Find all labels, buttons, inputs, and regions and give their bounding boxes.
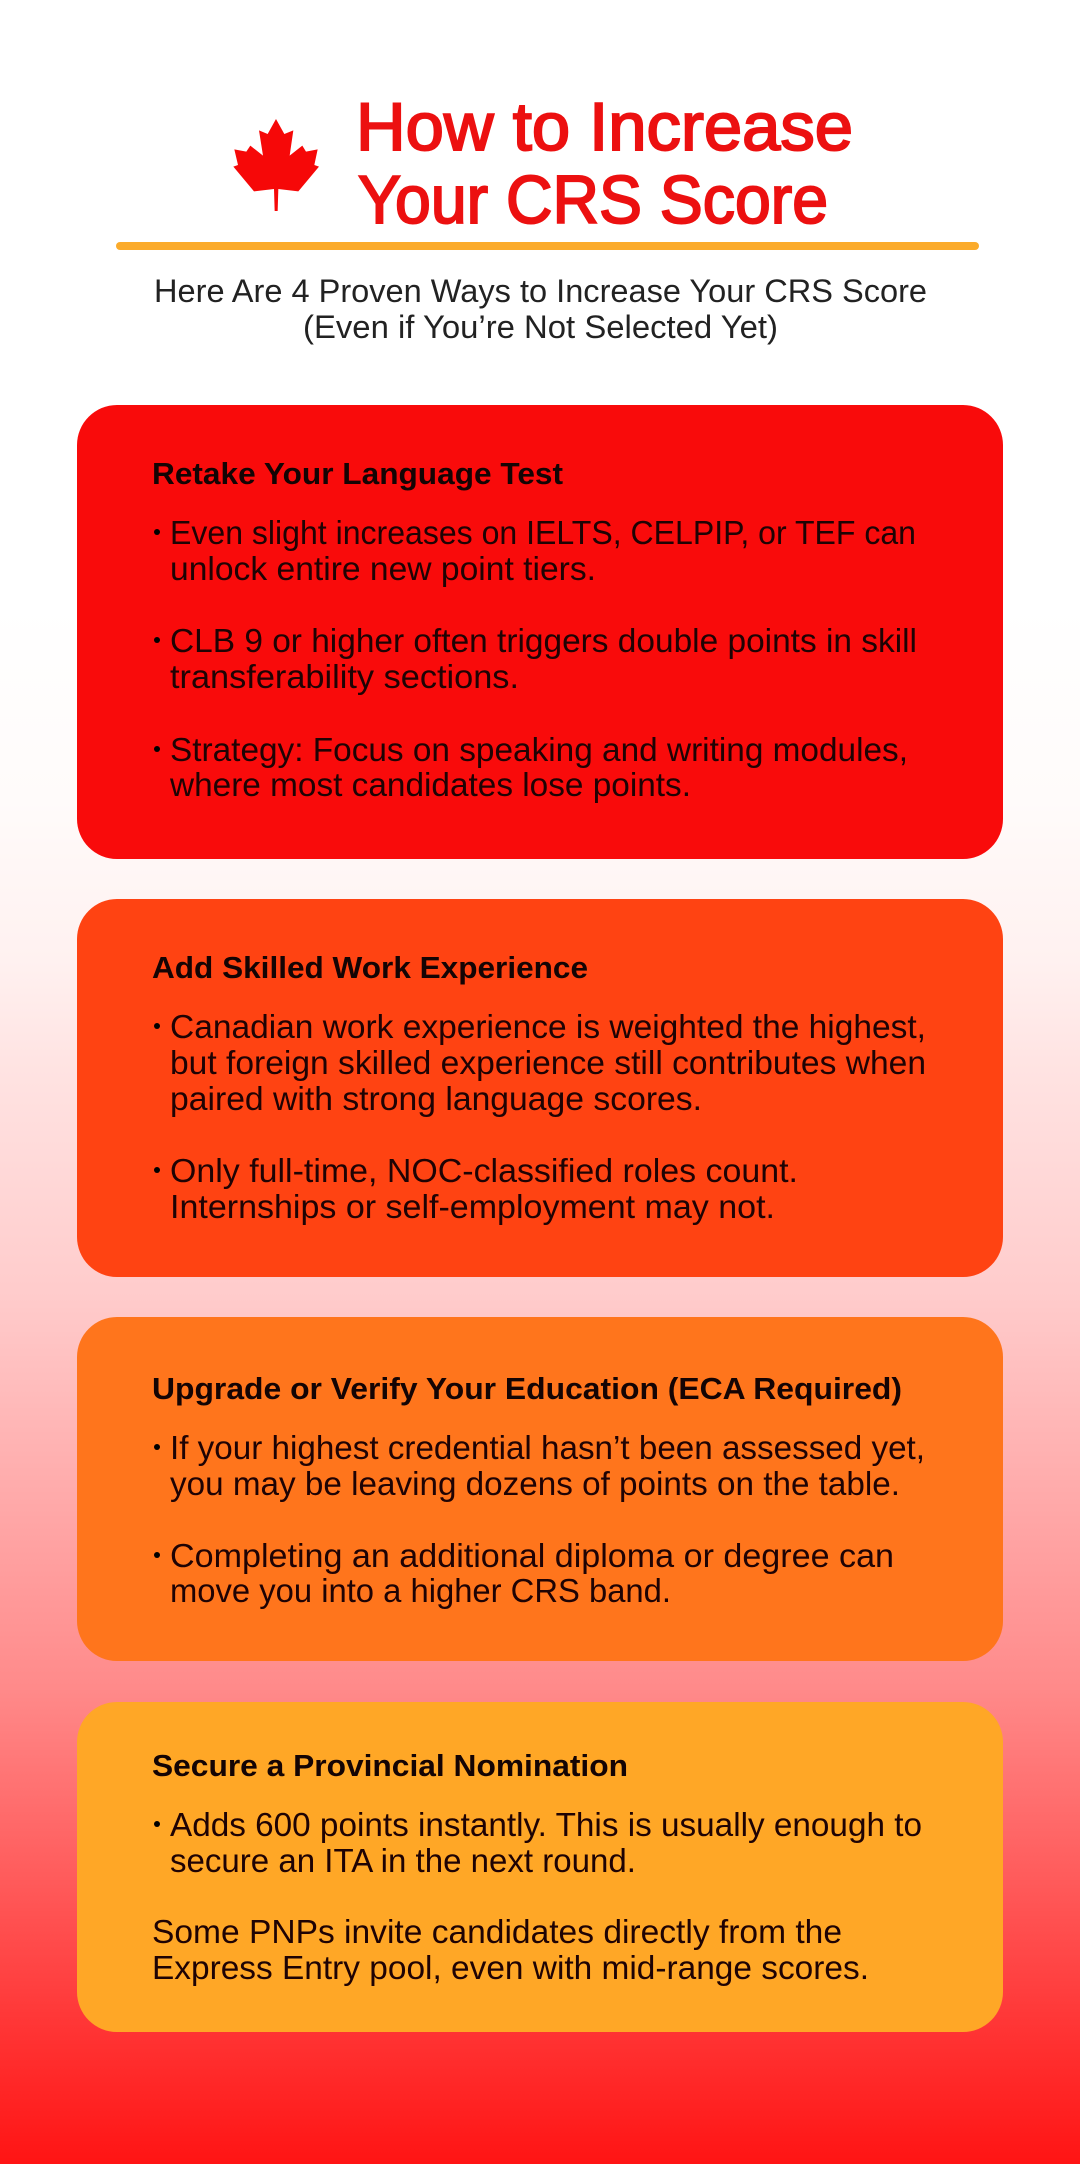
bullet: slight increases: Even slight increases on IELTS, CELPIP, or TEF can	[170, 514, 916, 551]
bullet: additional diploma: Completing an additional diploma or degree can	[170, 1537, 894, 1574]
bullet: full-time roles: Internships or self-employment may not.	[170, 1188, 775, 1225]
accent rule	[116, 242, 979, 250]
title	[356, 89, 853, 238]
bullet: adds 600 points: secure an ITA in the next round.	[170, 1842, 636, 1879]
heading: add skilled work experience: Add Skilled Work Experience	[152, 950, 588, 985]
bullet: slight increases: unlock entire new point tiers.	[170, 550, 596, 587]
bullet: canadian experience: but foreign skilled experience still contributes when	[170, 1044, 926, 1081]
note: PNP invitations: Some PNPs invite candidates directly from the	[152, 1913, 842, 1950]
bullet: full-time roles: Only full-time, NOC-classified roles count.	[170, 1152, 798, 1189]
subtitle: Here Are 4 Proven Ways to Increase Your CRS Score	[154, 273, 927, 309]
bullet: canadian experience: paired with strong language scores.	[170, 1080, 702, 1117]
header	[116, 89, 979, 345]
bullet: full-time roles	[154, 1152, 798, 1225]
icon: maple leaf	[233, 119, 319, 211]
bullet: canadian experience	[154, 1008, 926, 1117]
bullet: credential assessed: If your highest credential hasn’t been assessed yet,	[170, 1429, 925, 1466]
bullet: CLB 9: CLB 9 or higher often triggers double points in skill	[170, 622, 917, 659]
bullet: CLB 9	[154, 622, 917, 695]
subtitle: (Even if You’re Not Selected Yet)	[303, 309, 778, 345]
bullet: adds 600 points: Adds 600 points instantly. This is usually enough to	[170, 1806, 922, 1843]
heading: upgrade or verify education: Upgrade or Verify Your Education (ECA Required)	[152, 1371, 902, 1406]
note: PNP invitations	[152, 1913, 869, 1986]
bullet: additional diploma	[154, 1537, 894, 1609]
title: Your CRS Score	[358, 162, 828, 238]
bullet: CLB 9: transferability sections.	[170, 658, 519, 695]
bullet: strategy	[154, 731, 908, 803]
bullet: slight increases	[154, 514, 916, 587]
heading: retake your language test: Retake Your Language Test	[152, 456, 563, 491]
bullet: strategy: where most candidates lose points.	[169, 766, 691, 803]
panel: skilled work experience	[77, 899, 1003, 1277]
bullet: canadian experience: Canadian work experience is weighted the highest,	[170, 1008, 926, 1045]
bullet: credential assessed: you may be leaving dozens of points on the table.	[170, 1465, 900, 1502]
bullet: credential assessed	[154, 1429, 925, 1502]
title: How to Increase	[356, 89, 853, 165]
note: PNP invitations: Express Entry pool, even with mid-range scores.	[152, 1949, 869, 1986]
panel: education	[77, 1317, 1003, 1661]
panel: retake language test	[77, 405, 1003, 859]
bullet: additional diploma: move you into a higher CRS band.	[170, 1572, 671, 1609]
panel: provincial nomination	[77, 1702, 1003, 2032]
bullet: adds 600 points	[154, 1806, 922, 1879]
bullet: strategy: Strategy: Focus on speaking and writing modules,	[170, 731, 908, 768]
subtitle	[154, 273, 927, 345]
heading: secure a provincial nomination: Secure a Provincial Nomination	[152, 1748, 628, 1783]
